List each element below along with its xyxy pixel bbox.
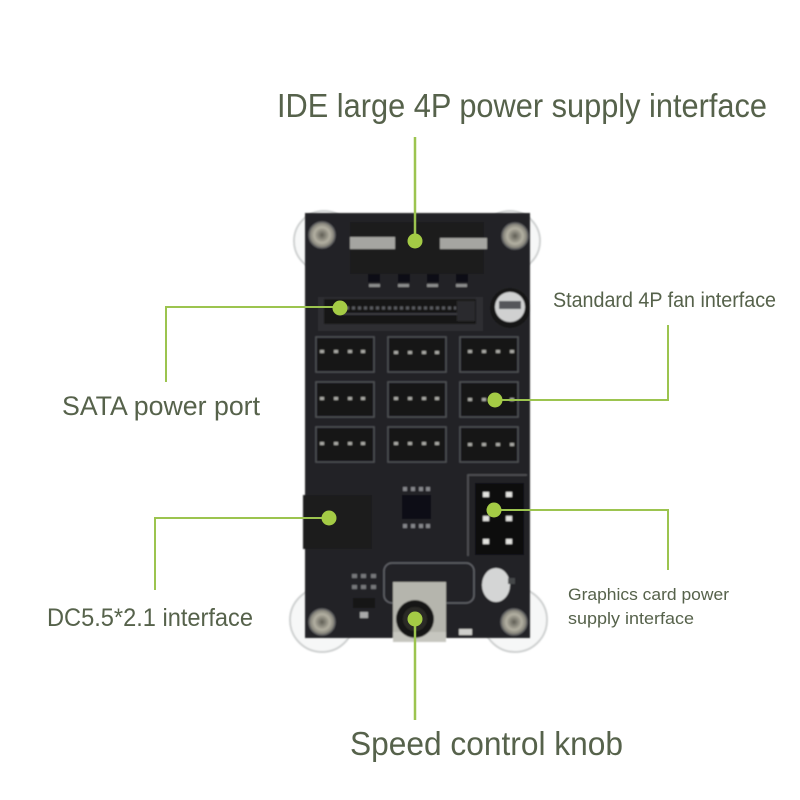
control chip [402, 487, 431, 528]
small components [352, 574, 472, 635]
capacitor bottom [482, 568, 515, 602]
label: graphics card [568, 585, 729, 628]
callout: SATA [166, 300, 348, 382]
header pins [320, 350, 514, 446]
label: IDE: IDE large 4P power supply interface [277, 87, 767, 124]
DC jack [303, 495, 372, 549]
callout: graphics card [486, 502, 668, 570]
mounting screws [309, 222, 528, 635]
label: DC: DC5.5*2.1 interface [47, 604, 253, 632]
speed control knob [384, 563, 474, 642]
graphics card power header [468, 475, 527, 556]
circuit board [303, 213, 530, 642]
label: standard 4P: Standard 4P fan interface [553, 289, 776, 312]
callout: IDE power [408, 137, 422, 248]
label: knob: Speed control knob [350, 725, 623, 762]
4P fan headers [316, 337, 518, 462]
callout: standard 4P [488, 325, 668, 408]
capacitor top [490, 288, 530, 328]
label: SATA: SATA power port [62, 391, 260, 421]
label: graphics card: Graphics card power [568, 585, 729, 604]
label: graphics card: supply interface [568, 609, 694, 628]
SATA connector [318, 297, 483, 331]
IDE 4P connector [350, 222, 487, 287]
suction cups [290, 211, 547, 652]
callout: DC [155, 510, 336, 590]
callout: knob [408, 612, 422, 720]
